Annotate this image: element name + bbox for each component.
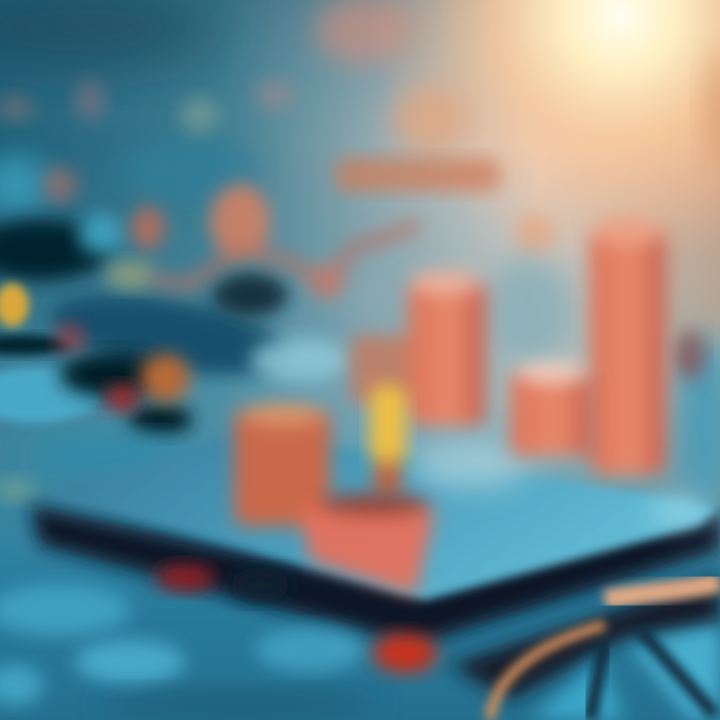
small coloured accents left bbox=[0, 260, 190, 502]
left background blocks bbox=[0, 0, 295, 215]
bar: far right bbox=[590, 218, 666, 475]
right mid background bbox=[345, 255, 720, 505]
tablet: screen bbox=[48, 432, 720, 600]
line chart smudge bbox=[131, 184, 555, 300]
bar: short right bbox=[510, 362, 594, 456]
bar: middle tall bbox=[350, 270, 486, 426]
lower right tripod and ribbons bbox=[450, 575, 720, 720]
bar: front bbox=[234, 403, 330, 526]
sun glow bbox=[315, 0, 720, 265]
pale glare on tablet bbox=[410, 441, 710, 522]
dark shapes left bbox=[0, 215, 350, 473]
red accent under tablet bbox=[373, 633, 437, 673]
yellow flame bar bbox=[370, 385, 406, 495]
orange reflection on tablet bbox=[300, 493, 435, 595]
blurred heading smudge bbox=[335, 158, 500, 192]
bottom panels bbox=[0, 564, 380, 719]
tablet: dark edge bbox=[30, 505, 720, 645]
